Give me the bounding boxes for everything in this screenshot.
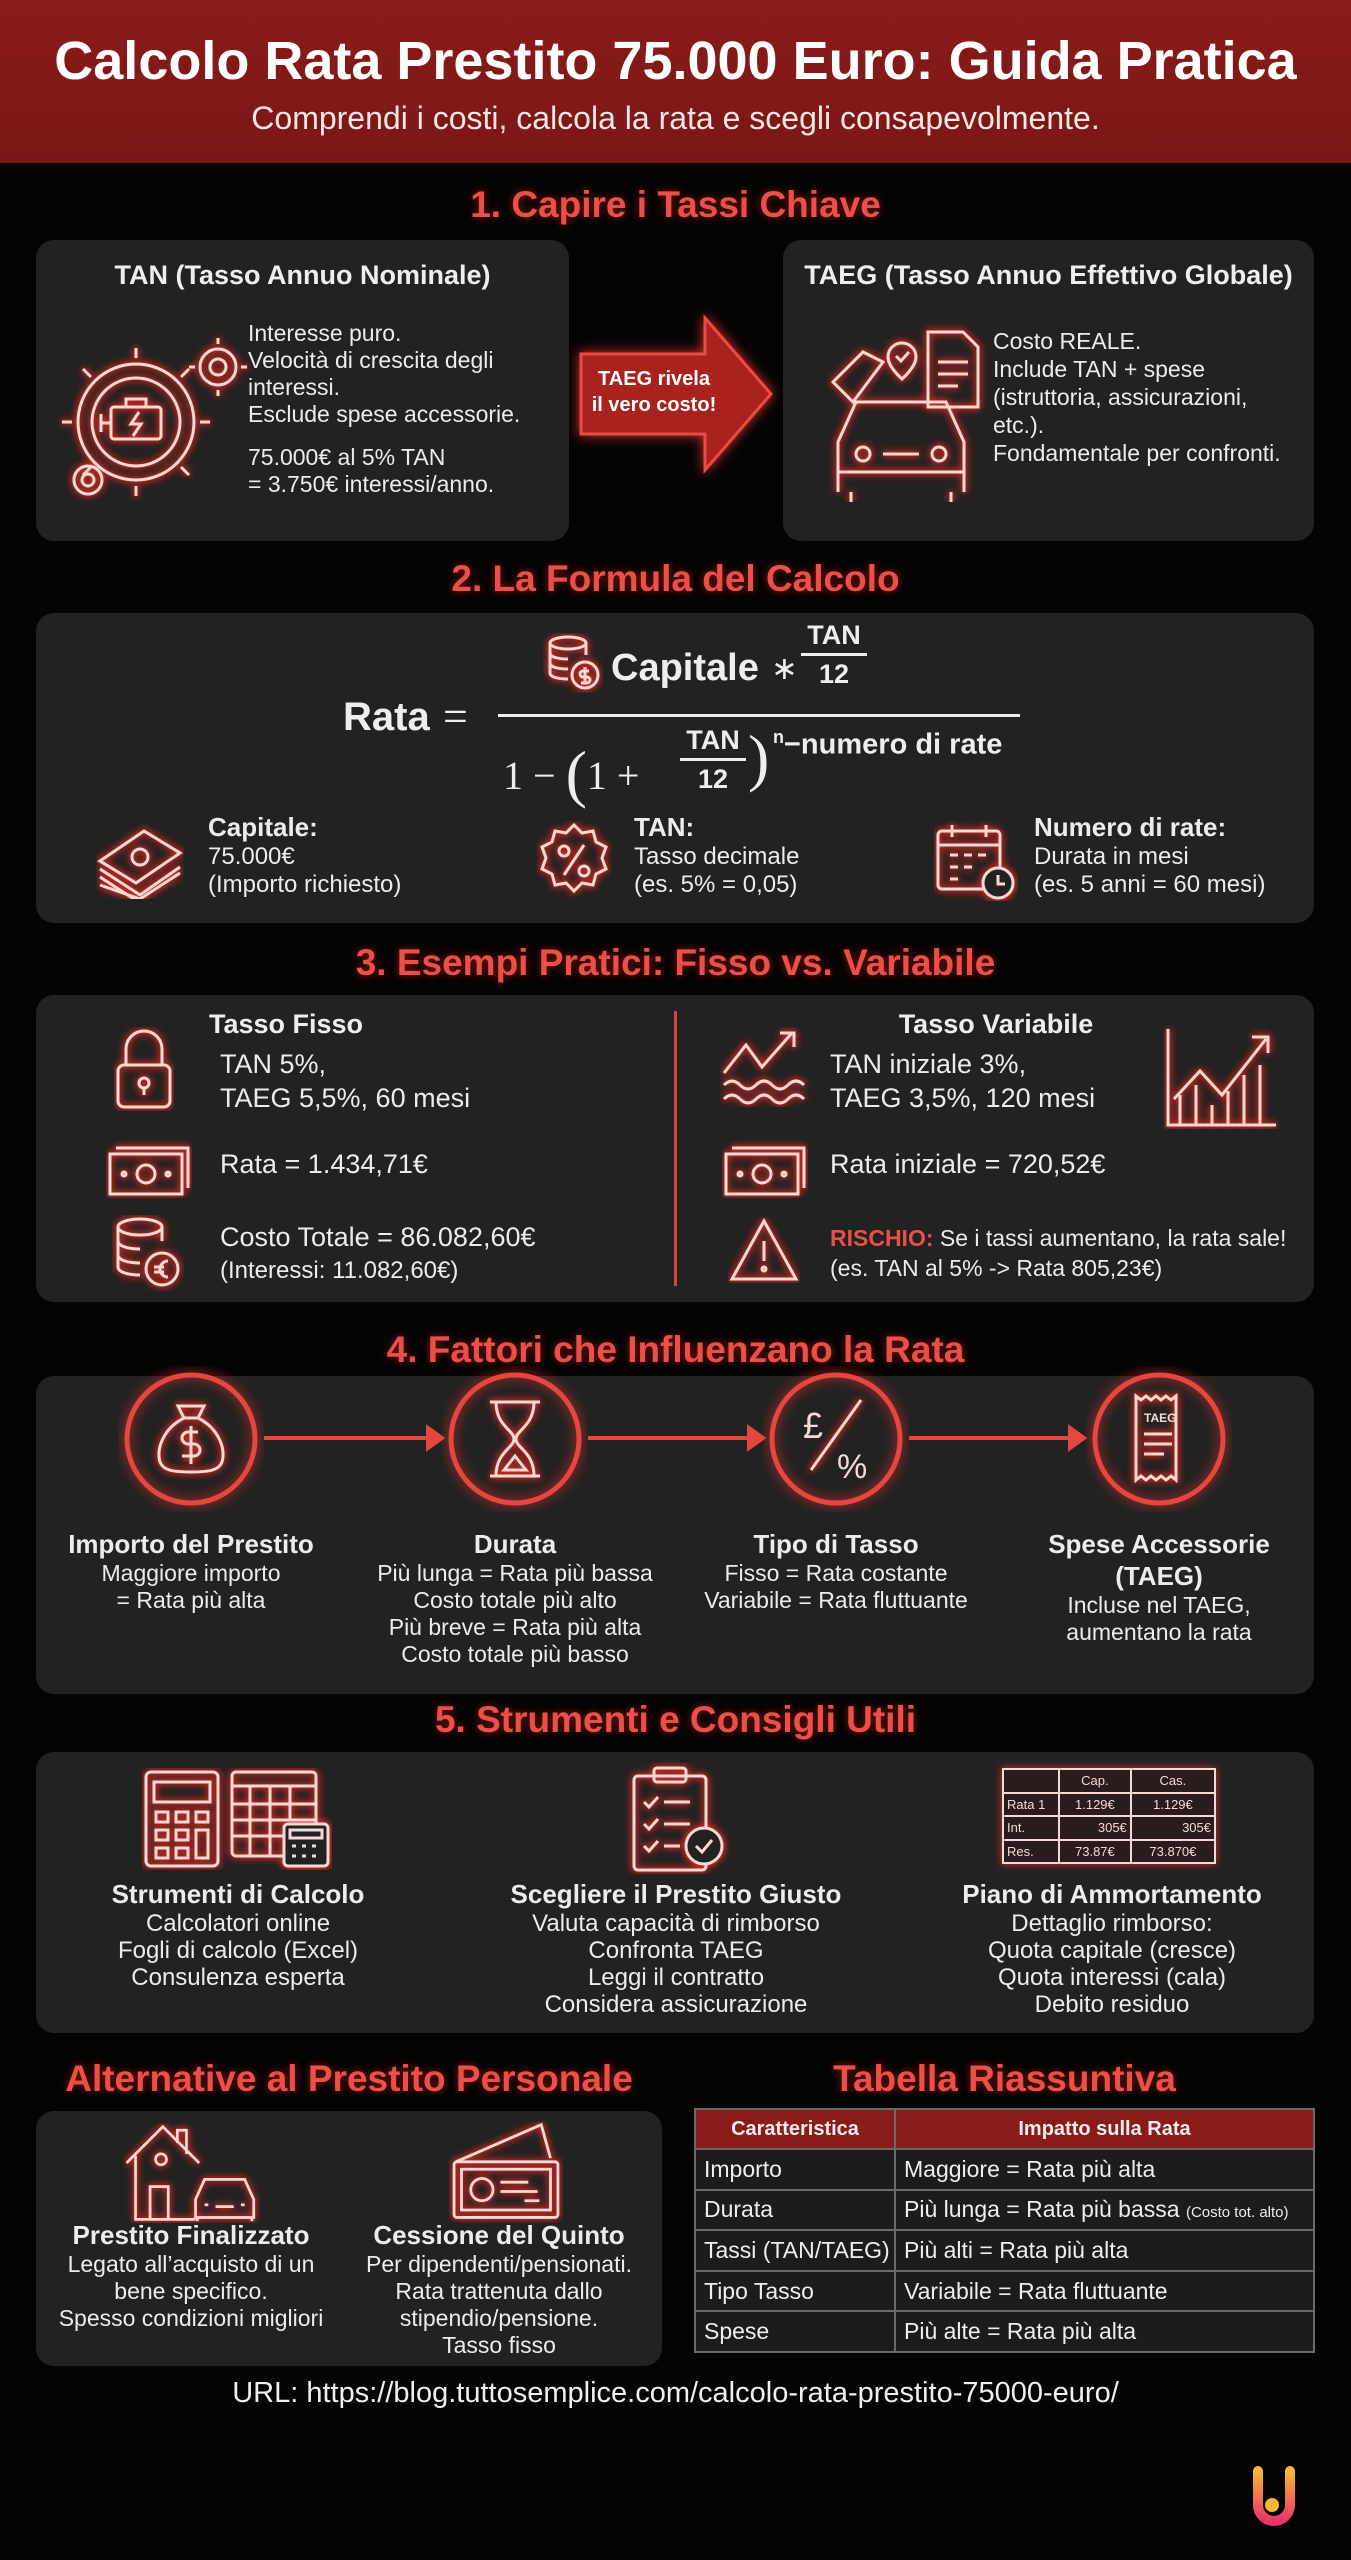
tool: scegliere il prestito (511, 1762, 841, 2018)
icon: pound percent in circle: % (837, 1448, 867, 1486)
formula: ∗ (771, 650, 798, 686)
heading: tabella: Tabella Riassuntiva (833, 2058, 1176, 2099)
icon: calculators spreadsheet (142, 1768, 332, 1870)
TAN text (248, 320, 520, 497)
TAN text: = 3.750€ interessi/anno. (248, 471, 494, 497)
TAEG text: etc.). (993, 412, 1044, 438)
icon: coins euro (112, 1215, 184, 1291)
icon: amortization mini table: Cas. (1160, 1773, 1186, 1788)
formula: TAN 12 (807, 620, 861, 689)
summary table: Impatto sulla Rata (1018, 2118, 1191, 2140)
icon: banknotes (106, 1140, 192, 1198)
formula (343, 620, 1020, 809)
icon: house and car (121, 2123, 261, 2223)
summary table: Durata (704, 2196, 773, 2222)
factor: tipo di tasso: Tipo di Tasso (753, 1529, 919, 1559)
TAN text: Interesse puro. (248, 320, 401, 346)
panel: formula (36, 613, 1314, 923)
alternative: cessione del quinto: stipendio/pensione. (400, 2305, 598, 2331)
formula: = (443, 692, 468, 741)
formula: TAN 12 (686, 725, 740, 794)
legend: TAN: TAN: (634, 812, 694, 842)
fisso column: Tasso Fisso (209, 1009, 363, 1039)
icon: amortization mini table: 305€ (1182, 1820, 1211, 1835)
heading: alternative: Alternative al Prestito Personale (65, 2058, 633, 2099)
factor: spese accessorie: Incluse nel TAEG, (1067, 1592, 1251, 1618)
alternative: prestito finalizzato (59, 2123, 323, 2331)
legend: numero di rate: (es. 5 anni = 60 mesi) (1034, 871, 1265, 898)
legend: TAN: Tasso decimale (634, 843, 799, 870)
legend: numero di rate: Numero di rate: (1034, 812, 1226, 842)
factor: durata: Costo totale più basso (401, 1641, 629, 1667)
icon: percent badge (536, 821, 612, 898)
TAN text: Velocità di crescita degli (248, 347, 493, 373)
panel: fattori (36, 1376, 1314, 1694)
alternative: cessione del quinto (366, 2121, 632, 2358)
panel: esempi (36, 995, 1314, 1302)
icon: banknotes (722, 1140, 808, 1198)
TAN heading: TAN (Tasso Annuo Nominale) (114, 260, 490, 290)
factor: importo (68, 1366, 314, 1613)
tool: piano di ammortamento: Quota capitale (cresce) (988, 1937, 1236, 1964)
variabile column (720, 1009, 1286, 1283)
subtitle: Comprendi i costi, calcola la rata e scegli consapevolmente. (251, 100, 1100, 136)
tool: strumenti di calcolo: Consulenza esperta (131, 1964, 345, 1991)
icon: bar chart up (1164, 1025, 1280, 1129)
TAEG text: (istruttoria, assicurazioni, (993, 384, 1247, 410)
factor: spese accessorie: aumentano la rata (1066, 1619, 1252, 1645)
icon: trend waves (720, 1027, 810, 1107)
header banner (0, 0, 1351, 163)
factor: spese accessorie: (TAEG) (1115, 1561, 1203, 1591)
tool: strumenti di calcolo (112, 1768, 364, 1991)
divider (674, 1011, 677, 1286)
panel: TAEG (783, 240, 1314, 541)
tool: piano di ammortamento: Debito residuo (1035, 1991, 1189, 2018)
summary table: Più alti = Rata più alta (904, 2237, 1128, 2263)
icon: amortization mini table: 1.129€ (1075, 1797, 1115, 1812)
alternative: prestito finalizzato: Prestito Finalizzato (73, 2220, 309, 2250)
factor: spese accessorie (1048, 1366, 1270, 1645)
summary table (694, 2108, 1315, 2353)
tool: scegliere il prestito: Scegliere il Prestito Giusto (511, 1879, 841, 1909)
legend: numero di rate: Durata in mesi (1034, 843, 1189, 870)
icon: receipt in circle: TAEG (1144, 1411, 1176, 1425)
tool: scegliere il prestito: Leggi il contratto (588, 1964, 764, 1991)
TAEG text: Costo REALE. (993, 328, 1141, 354)
tool: strumenti di calcolo: Calcolatori online (146, 1910, 330, 1937)
URL footer: URL: https://blog.tuttosemplice.com/calcolo-rata-prestito-75000-euro/ (232, 2377, 1119, 2409)
factor: durata (377, 1366, 653, 1667)
factor: durata: Più lunga = Rata più bassa (377, 1560, 653, 1586)
alternative: cessione del quinto: Rata trattenuta dallo (395, 2278, 603, 2304)
variabile column: TAEG 3,5%, 120 mesi (830, 1083, 1095, 1113)
fisso column (106, 1009, 536, 1291)
summary table: Tassi (TAN/TAEG) (704, 2237, 890, 2263)
legend: capitale: (Importo richiesto) (208, 871, 401, 898)
variabile column: Tasso Variabile (899, 1009, 1093, 1039)
icon: payslip (449, 2121, 563, 2223)
legend: numero di rate (934, 812, 1265, 901)
icon: calendar clock (934, 821, 1018, 901)
heading section 3: 3. Esempi Pratici: Fisso vs. Variabile (356, 942, 995, 983)
icon: gear engine (57, 333, 252, 502)
tool: strumenti di calcolo: Fogli di calcolo (Excel) (118, 1937, 358, 1964)
factor: tipo di tasso (704, 1366, 968, 1613)
alternative: cessione del quinto: Per dipendenti/pensionati. (366, 2251, 632, 2277)
fisso column: Costo Totale = 86.082,60€ (220, 1222, 536, 1252)
alternative: prestito finalizzato: bene specifico. (114, 2278, 268, 2304)
factor: durata: Durata (474, 1529, 556, 1559)
fisso column: TAN 5%, (220, 1049, 326, 1079)
variabile column: (es. TAN al 5% -> Rata 805,23€) (830, 1255, 1162, 1281)
fisso column: TAEG 5,5%, 60 mesi (220, 1083, 470, 1113)
fisso column: (Interessi: 11.082,60€) (220, 1257, 458, 1284)
icon: amortization mini table: 73.870€ (1149, 1844, 1196, 1859)
icon: amortization mini table: Int. (1007, 1820, 1025, 1835)
heading section 1: 1. Capire i Tassi Chiave (470, 184, 881, 225)
icon: amortization mini table: Res. (1007, 1844, 1034, 1859)
icon: money stack (96, 824, 184, 899)
arrow: TAEG rivela (570, 310, 780, 478)
icon: hourglass in circle (442, 1366, 588, 1512)
formula: Rata (343, 695, 430, 739)
summary table: Importo (704, 2156, 782, 2182)
panel: strumenti (36, 1752, 1314, 2033)
icon: coins (543, 633, 603, 693)
heading section 2: 2. La Formula del Calcolo (451, 558, 900, 599)
summary table: Maggiore = Rata più alta (904, 2156, 1155, 2182)
icon: amortization mini table: 1.129€ (1153, 1797, 1193, 1812)
factor: importo: = Rata più alta (117, 1587, 265, 1613)
variabile column: Rata iniziale = 720,52€ (830, 1149, 1105, 1179)
icon: amortization mini table (996, 1762, 1222, 1870)
summary table: Spese (704, 2318, 769, 2344)
formula: n−numero di rate (773, 727, 1002, 761)
arrow: TAEG rivela: TAEG rivela il vero costo! (592, 368, 716, 416)
TAN text: Esclude spese accessorie. 75.000€ al 5% TAN (248, 401, 520, 470)
factor: tipo di tasso: Variabile = Rata fluttuante (704, 1587, 968, 1613)
formula: 1 − (1 + (503, 738, 639, 809)
formula: Capitale (611, 647, 759, 689)
tool: piano di ammortamento: Dettaglio rimborso: (1011, 1910, 1213, 1937)
arrows between circles (264, 1424, 1088, 1452)
TAEG text: Include TAN + spese (993, 356, 1205, 382)
TAEG heading: TAEG (Tasso Annuo Effettivo Globale) (804, 260, 1293, 290)
tool: scegliere il prestito: Considera assicurazione (545, 1991, 807, 2018)
alternative: prestito finalizzato: Legato all’acquisto di un (68, 2251, 314, 2277)
legend: capitale: Capitale: (208, 812, 318, 842)
panel: alternative (36, 2111, 662, 2366)
icon: warning (728, 1217, 800, 1283)
summary table: Tipo Tasso (704, 2278, 814, 2304)
TAEG text: Fondamentale per confronti. (993, 440, 1281, 466)
TAN text: interessi. (248, 374, 340, 400)
factor: durata: Più breve = Rata più alta (389, 1614, 641, 1640)
legend: capitale: 75.000€ (208, 843, 295, 870)
heading section 4: 4. Fattori che Influenzano la Rata (387, 1329, 964, 1370)
summary table: Più alte = Rata più alta (904, 2318, 1136, 2344)
panel: TAN (36, 240, 569, 541)
factor: durata: Costo totale più alto (413, 1587, 617, 1613)
alternative: cessione del quinto: Cessione del Quinto (373, 2220, 625, 2250)
icon: amortization mini table: 305€ (1098, 1820, 1127, 1835)
icon: pound percent in circle: £ (803, 1405, 823, 1446)
legend: TAN (536, 812, 799, 898)
factor: spese accessorie: Spese Accessorie (1048, 1529, 1270, 1559)
tool: scegliere il prestito: Confronta TAEG (588, 1937, 764, 1964)
tool: piano di ammortamento: Piano di Ammortamento (962, 1879, 1262, 1909)
icon: amortization mini table: 73.87€ (1075, 1844, 1115, 1859)
icon: amortization mini table: Rata 1 (1007, 1797, 1045, 1812)
summary table: Più lunga = Rata più bassa (Costo tot. alto) (904, 2196, 1288, 2222)
variabile column: TAN iniziale 3%, (830, 1049, 1026, 1079)
factor: importo: Importo del Prestito (68, 1529, 314, 1559)
factor: importo: Maggiore importo (102, 1560, 280, 1586)
icon: lock (114, 1027, 174, 1111)
tool: strumenti di calcolo: Strumenti di Calcolo (112, 1879, 364, 1909)
icon: amortization mini table: Cap. (1081, 1773, 1109, 1788)
tool: piano di ammortamento (962, 1762, 1262, 2018)
legend: capitale (96, 812, 401, 899)
icon: money bag in circle (118, 1366, 264, 1512)
alternative: prestito finalizzato: Spesso condizioni migliori (59, 2305, 323, 2331)
formula: ) (748, 722, 769, 793)
icon: receipt in circle (1086, 1366, 1232, 1512)
fisso column: Rata = 1.434,71€ (220, 1149, 428, 1179)
summary table: Caratteristica (731, 2118, 859, 2140)
TAEG text (993, 328, 1281, 466)
legend: TAN: (es. 5% = 0,05) (634, 871, 797, 898)
icon: car with tag and document (826, 324, 986, 502)
alternative: cessione del quinto: Tasso fisso (442, 2332, 556, 2358)
heading section 5: 5. Strumenti e Consigli Utili (435, 1699, 916, 1740)
icon: pound percent in circle (763, 1366, 909, 1512)
title: Calcolo Rata Prestito 75.000 Euro: Guida Pratica (54, 31, 1297, 91)
tool: scegliere il prestito: Valuta capacità di rimborso (532, 1910, 820, 1937)
factor: tipo di tasso: Fisso = Rata costante (724, 1560, 948, 1586)
icon: clipboard check (626, 1762, 730, 1874)
tool: piano di ammortamento: Quota interessi (cala) (998, 1964, 1226, 1991)
summary table: Variabile = Rata fluttuante (904, 2278, 1168, 2304)
variabile column: RISCHIO: Se i tassi aumentano, la rata sale! (830, 1225, 1286, 1251)
icon: logo (1250, 2465, 1300, 2535)
